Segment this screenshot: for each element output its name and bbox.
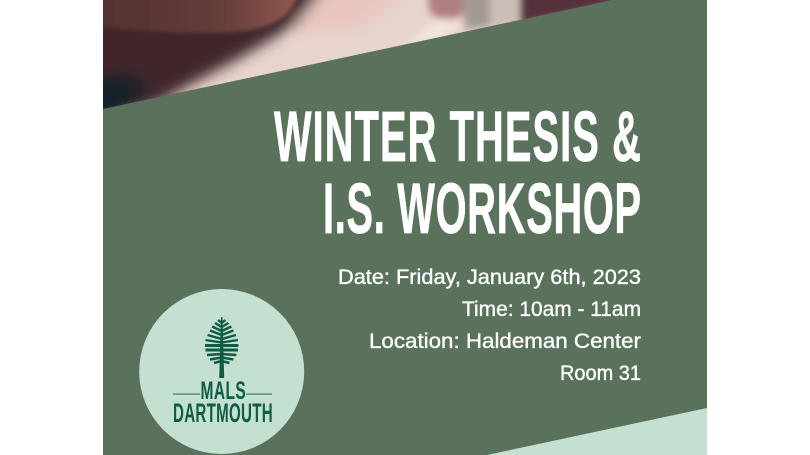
date: Date: Friday, January 6th, 2023 (338, 266, 641, 289)
title line 2: I.S. WORKSHOP (323, 170, 641, 249)
poster (103, 0, 707, 455)
logo text MALS: MALS (200, 377, 246, 405)
badge circle (139, 289, 304, 454)
title line 1: WINTER THESIS & (274, 98, 641, 177)
title (274, 98, 641, 249)
logo badge (139, 289, 304, 454)
time: Time: 10am - 11am (462, 298, 641, 321)
event details (338, 266, 641, 385)
photo: hands on a book (103, 0, 613, 109)
location: Location: Haldeman Center (369, 330, 641, 353)
logo text DARTMOUTH: DARTMOUTH (173, 397, 273, 428)
room: Room 31 (560, 362, 641, 385)
icon: pine tree (205, 317, 238, 378)
logo rule right (246, 393, 272, 396)
mint corner (487, 408, 707, 455)
green panel (103, 0, 707, 455)
logo rule left (173, 393, 200, 396)
